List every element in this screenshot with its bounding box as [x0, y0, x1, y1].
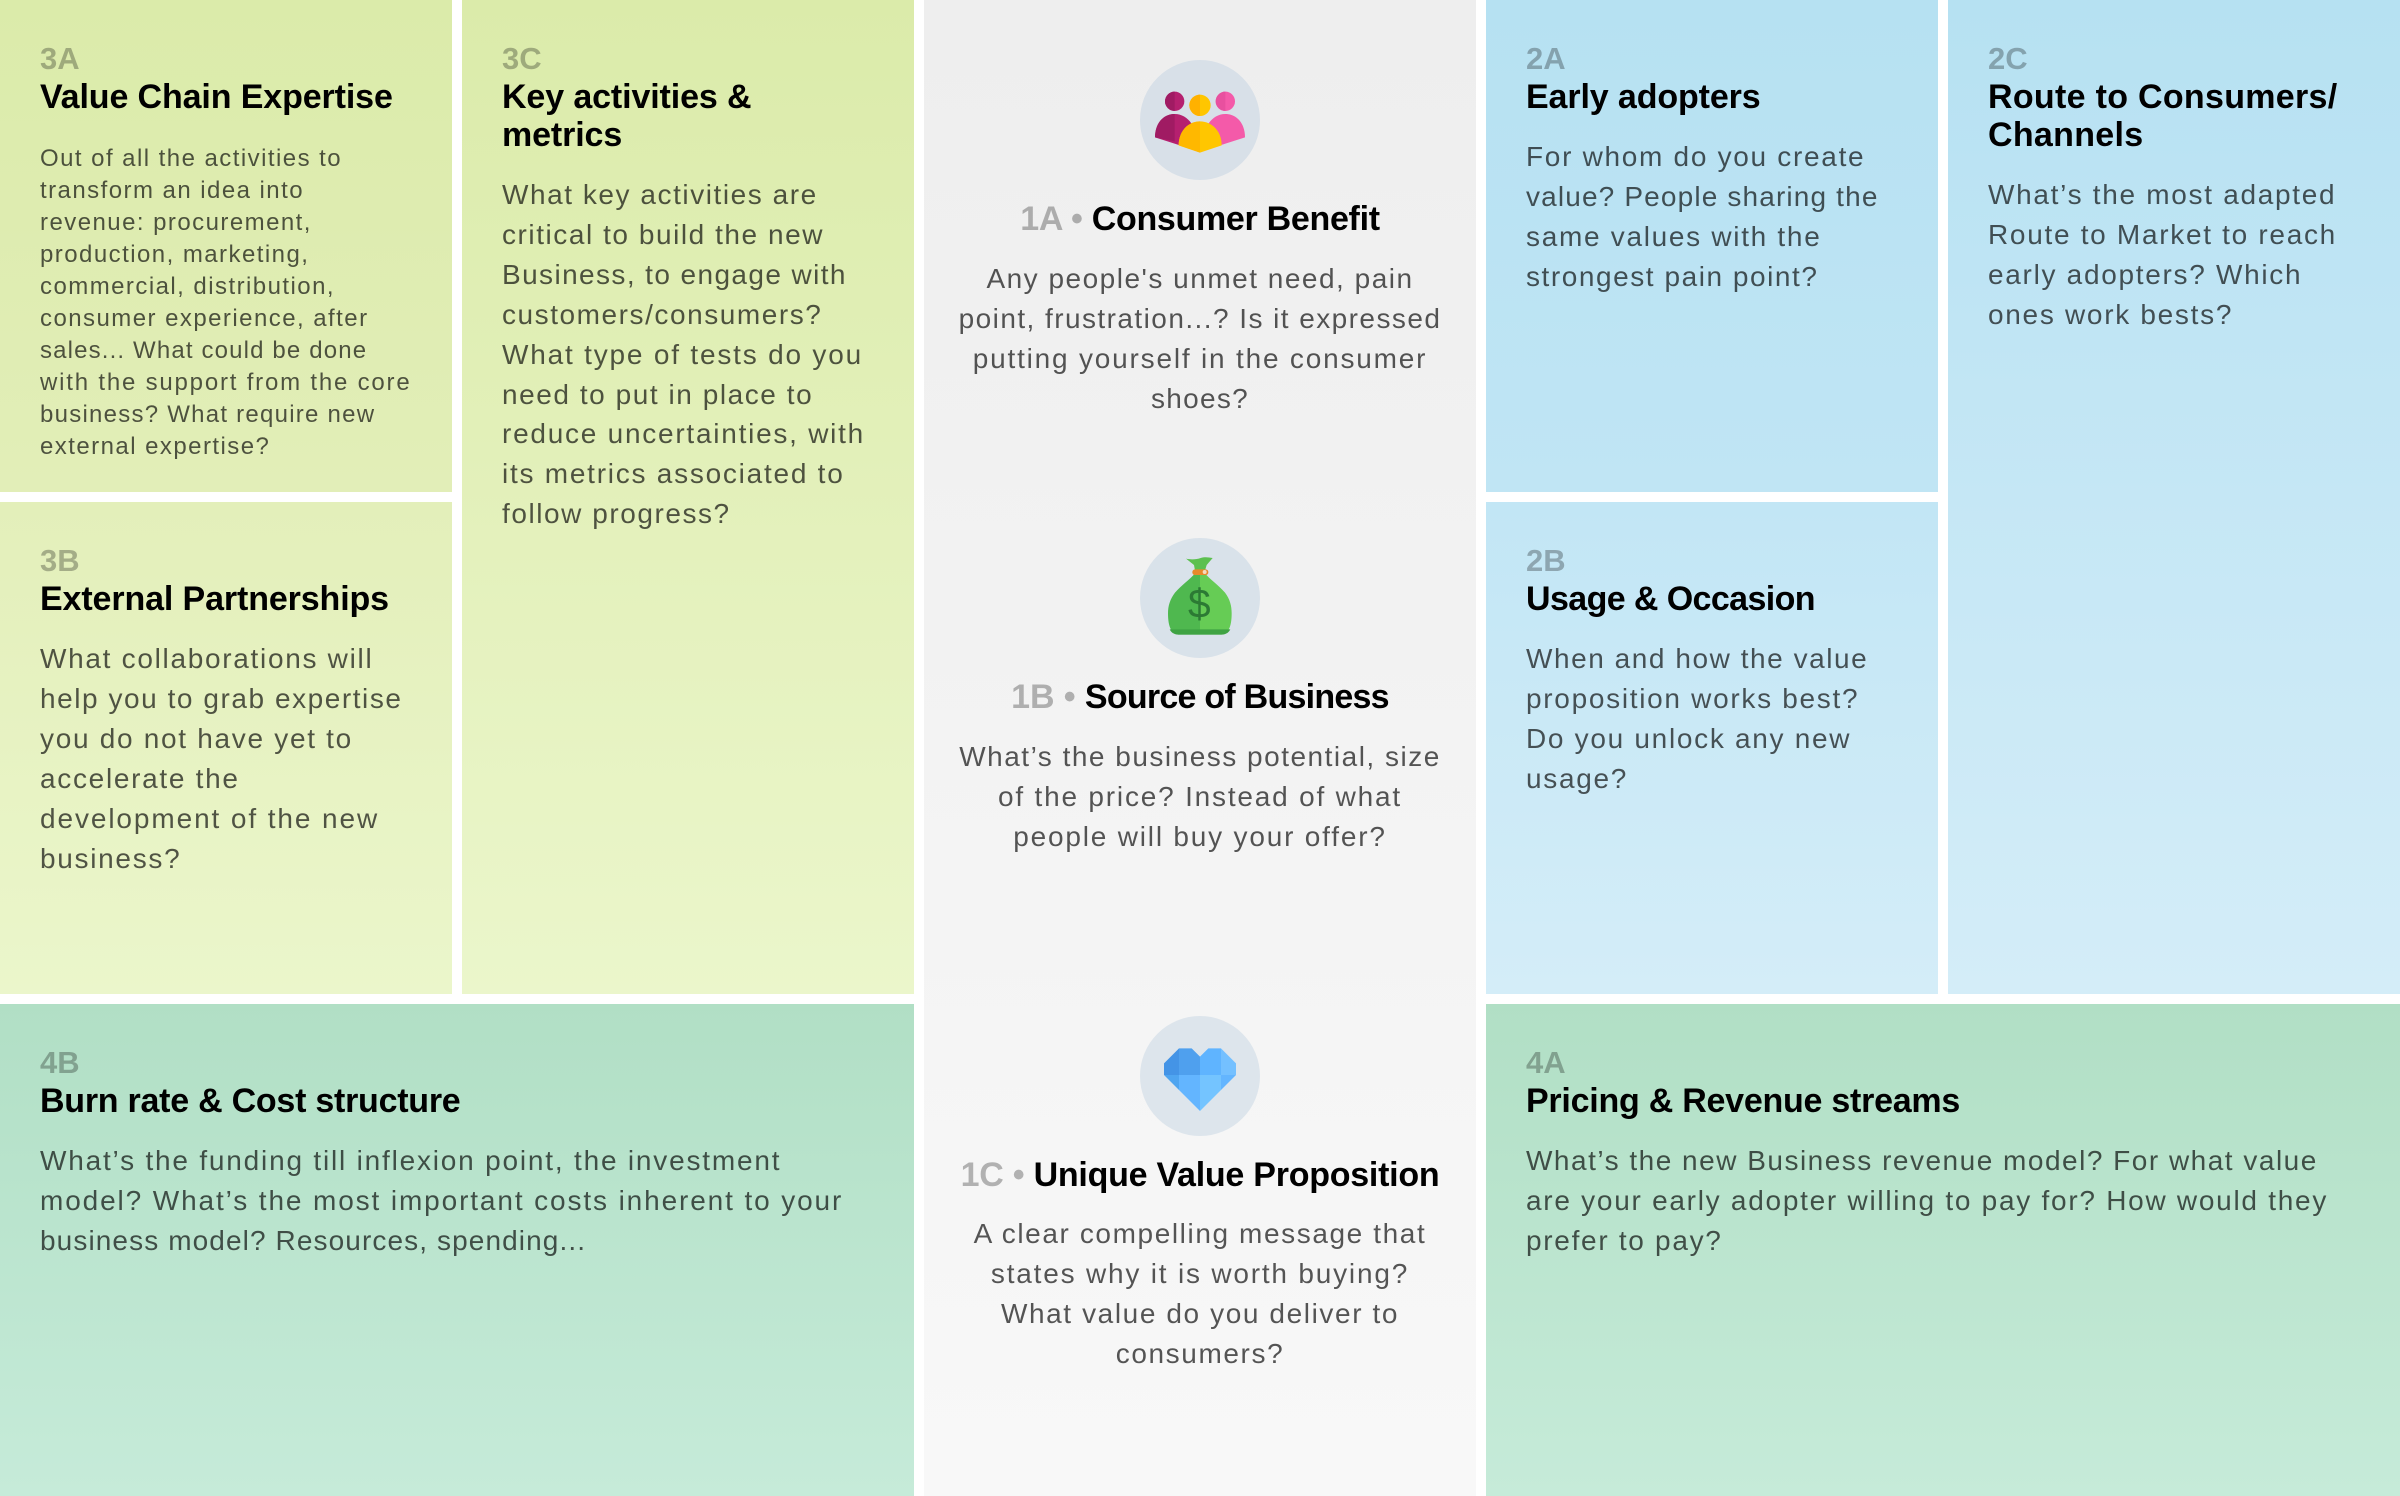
text: key activities body: reduce uncertainties, with: [502, 418, 865, 449]
text: value chain body: consumer experience, after: [40, 305, 369, 332]
text: key activities body: customers/consumers?: [502, 299, 822, 330]
text: unique value proposition body: What value do you deliver to: [1001, 1298, 1399, 1329]
heading: value chain expertise: Value Chain Expertise: [40, 78, 393, 116]
text: consumer benefit body: putting yourself in the consumer: [973, 343, 1427, 374]
text: pricing body: prefer to pay?: [1526, 1225, 1723, 1256]
heading: burn rate and cost structure: Burn rate & Cost structure: [40, 1082, 460, 1120]
text: value chain body: commercial, distribution,: [40, 273, 335, 300]
icon: money bag: $: [1188, 580, 1211, 626]
text: burn rate body: What’s the funding till inflexion point, the investment: [40, 1145, 781, 1176]
text: unique value proposition body: [974, 1218, 1426, 1369]
heading: route to consumers channels: [1988, 78, 2338, 154]
text: route body: [1988, 179, 2337, 330]
text: route body: Route to Market to reach: [1988, 219, 2337, 250]
text: consumer benefit body: [959, 263, 1441, 414]
text: partnerships body: business?: [40, 843, 181, 874]
label: 3C: 3C: [502, 41, 542, 76]
text: consumer benefit body: point, frustration...? Is it expressed: [959, 303, 1441, 334]
label: 4B: 4B: [40, 1045, 80, 1080]
text: pricing body: are your early adopter willing to pay for? How would they: [1526, 1185, 2328, 1216]
heading: external partnerships: External Partnerships: [40, 580, 389, 618]
text: key activities body: Business, to engage with: [502, 259, 847, 290]
heading: key activities and metrics: [502, 78, 751, 154]
text: pricing body: [1526, 1145, 2328, 1256]
text: partnerships body: development of the new: [40, 803, 379, 834]
heading: 1A consumer benefit: 1A • Consumer Benefit: [1020, 200, 1380, 238]
text: unique value proposition body: states why it is worth buying?: [991, 1258, 1409, 1289]
text: route body: ones work bests?: [1988, 299, 2233, 330]
panel: 4B burn rate: [0, 1004, 914, 1496]
heading: usage and occasion: Usage & Occasion: [1526, 580, 1815, 618]
text: consumer benefit body: Any people's unmet need, pain: [986, 263, 1414, 294]
text: value chain body: revenue: procurement,: [40, 209, 312, 236]
icon: consumers group: [1140, 60, 1260, 180]
panel: center column: [924, 0, 1476, 1496]
text: value chain body: business? What require new: [40, 401, 375, 428]
label: 4A: 4A: [1526, 1045, 1566, 1080]
panel: 3B external partnerships: [0, 502, 452, 994]
text: key activities body: its metrics associated to: [502, 458, 845, 489]
text: usage body: Do you unlock any new: [1526, 723, 1851, 754]
icon: blue heart: [1140, 1016, 1260, 1136]
text: usage body: [1526, 643, 1868, 794]
text: route body: early adopters? Which: [1988, 259, 2302, 290]
panel: 3A value chain expertise: [0, 0, 452, 492]
text: key activities body: What type of tests do you: [502, 339, 863, 370]
heading: pricing and revenue streams: Pricing & Revenue streams: [1526, 1082, 1960, 1120]
heading: key activities and metrics: metrics: [502, 116, 622, 154]
text: value chain body: transform an idea into: [40, 177, 304, 204]
text: unique value proposition body: consumers?: [1116, 1338, 1284, 1369]
panel: 2A early adopters: [1486, 0, 1938, 492]
text: consumer benefit body: shoes?: [1151, 383, 1249, 414]
text: key activities body: need to put in place to: [502, 379, 813, 410]
text: value chain body: [40, 145, 411, 460]
text: burn rate body: business model? Resources, spending...: [40, 1225, 586, 1256]
text: early adopters body: [1526, 141, 1879, 292]
label: 3A: 3A: [40, 41, 80, 76]
text: partnerships body: accelerate the: [40, 763, 240, 794]
icon: money bag: [1140, 538, 1260, 658]
text: key activities body: [502, 179, 865, 529]
text: source of business body: people will buy your offer?: [1013, 821, 1387, 852]
heading: route to consumers channels: Channels: [1988, 116, 2143, 154]
text: value chain body: sales... What could be done: [40, 337, 367, 364]
text: source of business body: [959, 741, 1441, 852]
text: early adopters body: For whom do you create: [1526, 141, 1865, 172]
text: early adopters body: value? People sharing the: [1526, 181, 1879, 212]
text: partnerships body: you do not have yet to: [40, 723, 353, 754]
text: usage body: When and how the value: [1526, 643, 1868, 674]
text: early adopters body: strongest pain point?: [1526, 261, 1819, 292]
text: route body: What’s the most adapted: [1988, 179, 2336, 210]
text: usage body: proposition works best?: [1526, 683, 1859, 714]
heading: route to consumers channels: Route to Consumers/: [1988, 78, 2338, 116]
heading: early adopters: Early adopters: [1526, 78, 1761, 116]
panel: 2B usage and occasion: [1486, 502, 1938, 994]
heading: 1C unique value proposition: 1C • Unique Value Proposition: [961, 1156, 1439, 1194]
panel: 2C route to consumers: [1948, 0, 2400, 994]
panel: 3C key activities: [462, 0, 914, 994]
text: key activities body: follow progress?: [502, 498, 731, 529]
text: value chain body: Out of all the activities to: [40, 145, 342, 172]
label: 2B: 2B: [1526, 543, 1566, 578]
label: 3B: 3B: [40, 543, 80, 578]
text: value chain body: production, marketing,: [40, 241, 309, 268]
text: key activities body: What key activities are: [502, 179, 818, 210]
text: key activities body: critical to build the new: [502, 219, 824, 250]
label: 2C: 2C: [1988, 41, 2028, 76]
text: source of business body: What’s the business potential, size: [959, 741, 1441, 772]
text: source of business body: of the price? Instead of what: [998, 781, 1402, 812]
text: partnerships body: What collaborations will: [40, 643, 373, 674]
text: partnerships body: help you to grab expertise: [40, 683, 403, 714]
heading: key activities and metrics: Key activities &: [502, 78, 751, 116]
text: value chain body: with the support from the core: [40, 369, 411, 396]
text: value chain body: external expertise?: [40, 433, 270, 460]
label: 2A: 2A: [1526, 41, 1566, 76]
text: burn rate body: model? What’s the most important costs inherent to your: [40, 1185, 843, 1216]
panel: 4A pricing and revenue: [1486, 1004, 2400, 1496]
text: early adopters body: same values with the: [1526, 221, 1821, 252]
text: unique value proposition body: A clear compelling message that: [974, 1218, 1426, 1249]
text: pricing body: What’s the new Business revenue model? For what value: [1526, 1145, 2318, 1176]
text: burn rate body: [40, 1145, 843, 1256]
text: usage body: usage?: [1526, 763, 1628, 794]
text: partnerships body: [40, 643, 403, 874]
heading: 1B source of business: 1B • Source of Business: [1011, 678, 1389, 716]
